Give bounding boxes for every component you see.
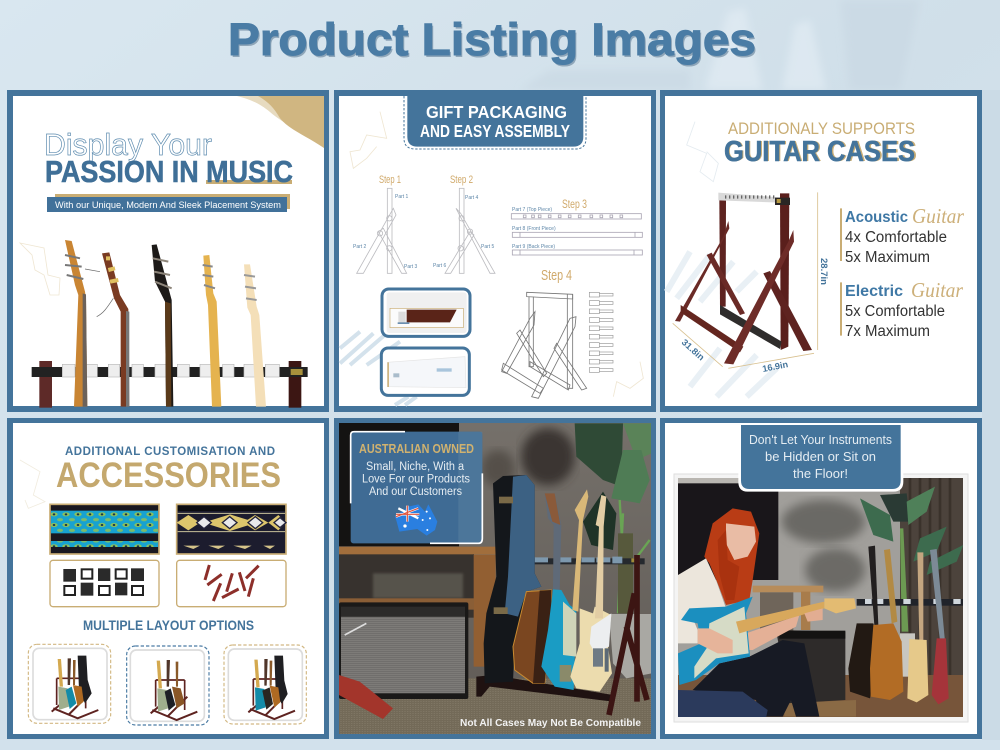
- dimensions: 31.8in: [680, 337, 706, 363]
- heading: customisation and accessories: ADDITIONAL CUSTOMISATION AND: [65, 446, 275, 458]
- cushion: [678, 690, 768, 718]
- subtitle ribbon: [47, 194, 290, 212]
- forearm: [746, 615, 799, 650]
- pickguard: [694, 607, 749, 678]
- heading: multiple layout options: MULTIPLE LAYOUT OPTIONS: [83, 618, 254, 633]
- part labels: [353, 194, 556, 270]
- part labels: Part 2: [353, 244, 367, 250]
- step 2 drawing: [445, 188, 495, 273]
- guitar body: [678, 597, 753, 685]
- hair front lock: [718, 530, 739, 600]
- heading: customisation and accessories: ACCESSORIES: [56, 456, 281, 495]
- acoustic guitar capacity: Guitar: [912, 204, 965, 228]
- panel: gift packaging and assembly: [334, 90, 656, 412]
- guitar case: [484, 475, 541, 683]
- room scene: [339, 423, 651, 735]
- woman with blue guitar: [678, 508, 856, 718]
- electric guitar capacity: Guitar: [911, 278, 964, 302]
- plant: [575, 423, 652, 678]
- banner: don't let your instruments: [738, 423, 903, 492]
- acoustic guitar capacity: 5x Maximum: [845, 249, 930, 266]
- rack bar: [533, 557, 645, 564]
- heading: additionally supports guitar cases: ADDITIONALY SUPPORTS: [728, 119, 915, 138]
- banner heading: AND EASY ASSEMBLY: [420, 121, 570, 141]
- disclaimer text: Not All Cases May Not Be Compatible: [460, 718, 641, 729]
- electric guitar capacity: 5x Comfortable: [845, 303, 945, 320]
- guitar 1: [65, 240, 87, 407]
- part labels: Part 5: [481, 244, 495, 250]
- guitars on rack photo: [32, 240, 308, 408]
- dimension lines: [673, 192, 818, 368]
- panel: customisation and accessories: [7, 418, 329, 739]
- acoustic guitar capacity: Acoustic: [845, 209, 908, 226]
- part labels: Part 7 (Top Piece): [512, 207, 552, 213]
- callout: Australian owned: And our Customers: [369, 486, 462, 498]
- part labels: Part 1: [395, 194, 409, 200]
- teal strap: [50, 504, 159, 554]
- dimensions: [680, 258, 829, 374]
- panel: additionally supports guitar cases: [660, 90, 982, 412]
- banner: [404, 96, 586, 149]
- part labels: Part 6: [433, 263, 447, 269]
- rack bar: [857, 599, 963, 606]
- guitar 2: [85, 252, 129, 407]
- amplifier: [776, 630, 845, 703]
- stand legs: [609, 555, 647, 715]
- part labels: Part 9 (Back Piece): [512, 244, 555, 250]
- decorative stripes: [340, 332, 417, 405]
- guitar 4: [203, 255, 221, 407]
- jeans: [693, 640, 819, 717]
- open gift box photo: [382, 289, 470, 336]
- panel: display your passion in music: [7, 90, 329, 412]
- layout option 3: [224, 645, 306, 724]
- hair: [704, 508, 759, 605]
- heading: additionally supports guitar cases: [724, 119, 917, 168]
- room scene: [678, 478, 963, 717]
- step 4 small parts: [589, 292, 613, 372]
- electric guitar capacity: [845, 278, 964, 340]
- subtitle ribbon: With our Unique, Modern And Sleek Placement System: [55, 200, 281, 211]
- white planter: [900, 633, 915, 677]
- red guitar corner: [339, 675, 393, 719]
- part labels: Part 8 (Front Piece): [512, 226, 556, 232]
- clip squares: [50, 560, 159, 607]
- acoustic guitar capacity: [845, 204, 965, 266]
- callout: Australian owned: Small, Niche, With a: [366, 461, 465, 473]
- gold corner swoosh: [237, 96, 324, 148]
- plant: [860, 487, 963, 632]
- banner heading: GIFT PACKAGING: [426, 102, 567, 122]
- navy strap: [177, 504, 286, 554]
- acoustic guitar capacity: 4x Comfortable: [845, 229, 947, 246]
- callout: Australian owned: [351, 432, 482, 543]
- guitars on stand: [848, 546, 949, 704]
- part labels: Part 3: [404, 264, 418, 270]
- spec bars: [838, 208, 844, 336]
- decorative outline: [687, 122, 718, 182]
- step labels: Step 3: [562, 197, 587, 211]
- step labels: Step 1: [379, 174, 401, 186]
- fretboard: [736, 602, 824, 633]
- step 3 drawing: [511, 214, 642, 255]
- blue electric guitar: [541, 489, 588, 690]
- guitar 5: [244, 264, 266, 407]
- picking arm: [698, 628, 733, 653]
- decorative outline: [20, 460, 45, 508]
- decorative outline: [350, 112, 387, 168]
- heading: additionally supports guitar cases: GUITAR CASES: [724, 136, 915, 168]
- fretting hand: [804, 608, 823, 622]
- dimensions: 16.9in: [761, 359, 789, 374]
- callout: Australian owned: AUSTRALIAN OWNED: [359, 441, 474, 456]
- base rail: [476, 675, 613, 702]
- electric guitar capacity: 7x Maximum: [845, 323, 930, 340]
- layout option 1: [28, 644, 111, 723]
- step labels: Step 4: [541, 267, 572, 284]
- title: Product Listing Images: [228, 14, 756, 65]
- heading: additionally supports guitar cases: GUITAR CASES: [725, 136, 917, 168]
- banner: don't let your instruments: the Floor!: [793, 467, 848, 481]
- acoustic guitar: [513, 493, 561, 683]
- step labels: Step 2: [450, 174, 473, 186]
- closed gift box photo: [381, 348, 469, 395]
- callout: Australian owned: Love For our Products: [362, 474, 470, 486]
- panel: living room photo with guitar stand: [334, 418, 656, 739]
- guitar 3: [152, 244, 173, 407]
- icon: Australia flag map: [395, 504, 437, 536]
- layout option 2: [127, 646, 209, 725]
- step 4 drawing: [502, 292, 587, 398]
- step 1 drawing: [357, 188, 407, 273]
- amplifier: [339, 602, 468, 699]
- panel: guitarist photo: [660, 418, 982, 739]
- step labels: [379, 174, 587, 284]
- electric guitar capacity: Electric: [845, 283, 903, 300]
- headstock: [824, 598, 856, 613]
- title: Product Listing Images: [230, 16, 758, 67]
- wooden pegs: [177, 560, 286, 607]
- heading: Display Your: Display Your: [44, 127, 212, 162]
- dimensions: 28.7in: [819, 258, 829, 285]
- face: [726, 523, 756, 560]
- banner: don't let your instruments: Don't Let Your Instruments: [749, 433, 892, 447]
- heading: Passion in Music: PASSION IN MUSIC: [45, 154, 293, 189]
- wooden stand: [675, 193, 812, 364]
- decorative stripes: [667, 252, 777, 397]
- banner heading: [420, 102, 570, 141]
- part labels: Part 4: [465, 195, 479, 201]
- floor patch: [784, 700, 856, 717]
- banner: don't let your instruments: be Hidden or Sit on: [765, 450, 876, 464]
- sweater: [678, 558, 726, 643]
- cream electric guitar: [570, 495, 612, 692]
- decorative guitar outline: [20, 243, 60, 295]
